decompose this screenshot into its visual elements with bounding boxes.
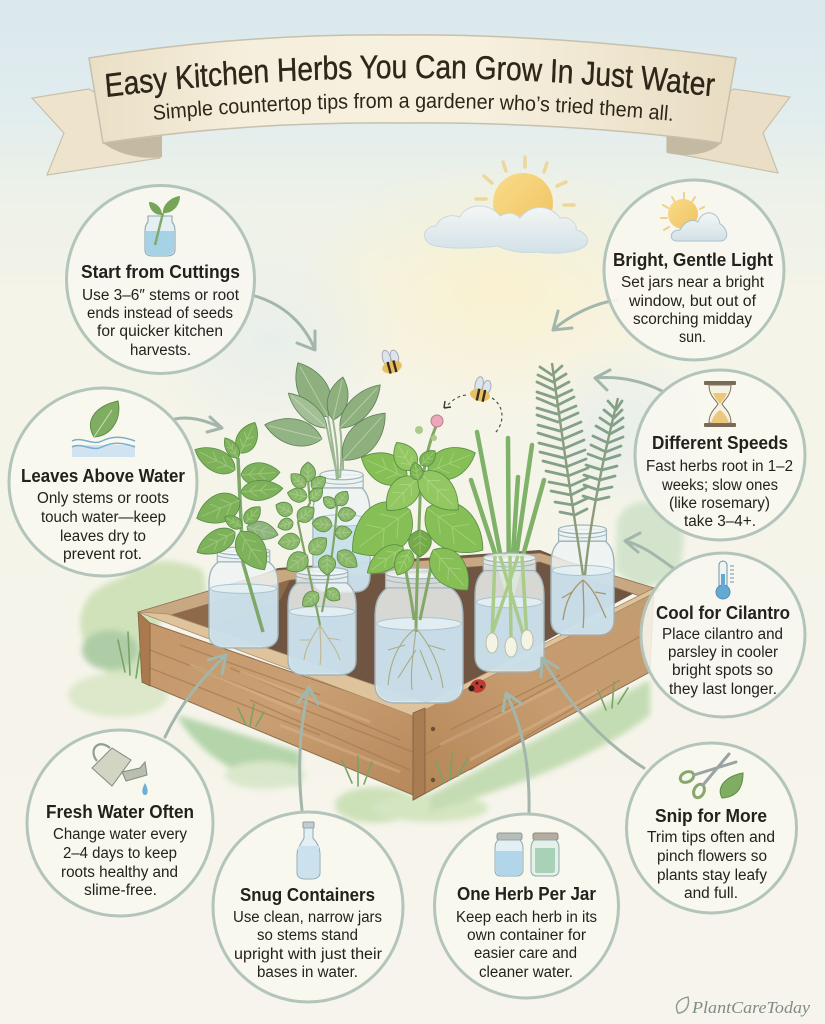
herb: sage in back jar [262, 356, 396, 592]
top rim [138, 588, 660, 716]
raised wood planter [118, 550, 660, 800]
panel: different speeds: Different Speeds [652, 433, 788, 453]
icon: bottle [297, 822, 320, 879]
panel: start from cuttings: for quicker kitchen [97, 323, 223, 340]
icon: jar with sprout [145, 196, 180, 256]
sun and cloud [424, 157, 588, 253]
herb: rosemary jar [537, 363, 623, 635]
bees [378, 347, 502, 434]
panel: snip for more: and full. [684, 885, 738, 902]
panel: snug containers [213, 812, 403, 1002]
panel: cool for cilantro: bright spots so [672, 662, 773, 679]
panel: cool for cilantro: Cool for Cilantro [656, 603, 790, 623]
panel: leaves above water: prevent rot. [63, 546, 142, 563]
panel: leaves above water [9, 388, 197, 576]
panel: fresh water often: 2–4 days to keep [63, 845, 177, 862]
panel: snug containers: Snug Containers [240, 885, 375, 905]
front corner post [413, 708, 425, 800]
panel: different speeds [635, 370, 805, 540]
subtitle text: Simple countertop tips from a gardener who’s tried them all. [154, 92, 672, 122]
panel: fresh water often: slime-free. [84, 882, 157, 899]
herb: mint jar [190, 418, 284, 648]
herb: basil jar [338, 415, 496, 703]
panel: cool for cilantro: parsley in cooler [668, 644, 778, 661]
arrows [165, 296, 673, 812]
panel: one herb per jar: Keep each herb in its [456, 909, 597, 926]
soil [166, 550, 640, 705]
panel: cool for cilantro: they last longer. [669, 681, 777, 698]
icon: thermometer [716, 561, 734, 599]
icon: leaf over water [72, 401, 135, 457]
panel: snug containers: upright with just their [234, 946, 382, 963]
panel: leaves above water: Only stems or roots [37, 490, 169, 507]
grass patches [68, 501, 684, 823]
panel: bright gentle light: Bright, Gentle Light [613, 250, 773, 270]
panel: snug containers: so stems stand [257, 927, 358, 944]
right wood face [413, 588, 654, 800]
panel: snip for more: pinch flowers so [657, 848, 767, 865]
panel: cool for cilantro: Place cilantro and [662, 626, 783, 643]
panel: start from cuttings: ends instead of seeds [87, 305, 233, 322]
panel: one herb per jar: own container for [467, 927, 586, 944]
panel: leaves above water: touch water—keep [41, 509, 166, 526]
icon: scissors and leaf [679, 754, 743, 799]
panel: cool for cilantro [641, 553, 805, 717]
panel: snip for more: plants stay leafy [657, 867, 767, 884]
panel: one herb per jar: easier care and [474, 945, 577, 962]
panel: fresh water often: Change water every [53, 826, 187, 843]
title banner [31, 34, 791, 176]
panel: fresh water often: Fresh Water Often [46, 802, 194, 822]
panel: one herb per jar: One Herb Per Jar [457, 884, 596, 904]
panel: one herb per jar: cleaner water. [479, 964, 573, 981]
icon: two jars [495, 833, 559, 876]
panel: leaves above water: leaves dry to [60, 528, 146, 545]
panel: bright gentle light: window, but out of [628, 293, 757, 310]
title text: Easy Kitchen Herbs You Can Grow In Just Water [106, 54, 716, 98]
panel: fresh water often: roots healthy and [61, 864, 178, 881]
panel: snip for more: Snip for More [655, 806, 767, 826]
panel: start from cuttings: Use 3–6″ stems or root [82, 287, 240, 304]
panel: leaves above water: Leaves Above Water [21, 466, 185, 486]
herb: oregano jar [273, 462, 362, 675]
ladybug [466, 677, 488, 696]
icon: hourglass [704, 381, 736, 427]
panel: bright gentle light: Set jars near a bright [621, 274, 765, 291]
left wood face [142, 623, 413, 795]
panel: bright gentle light: scorching midday [633, 311, 752, 328]
panel: different speeds: take 3–4+. [684, 513, 756, 530]
flower [415, 415, 443, 441]
panel: one herb per jar [434, 814, 618, 998]
panel: fresh water often [27, 730, 213, 916]
herb: green onion jar [471, 432, 544, 672]
panel: start from cuttings: harvests. [130, 342, 191, 359]
back rim and inner wall [138, 553, 654, 616]
panel: snip for more: Trim tips often and [647, 829, 775, 846]
grass tufts [118, 632, 628, 786]
panel: start from cuttings: Start from Cuttings [81, 262, 240, 282]
panel: snip for more [626, 743, 796, 913]
logo: PlantCareToday: PlantCareToday [691, 998, 810, 1017]
panel: different speeds: weeks; slow ones [661, 477, 778, 494]
panel: different speeds: (like rosemary) [669, 495, 770, 512]
icon: sun and cloud [661, 193, 727, 241]
panel: start from cuttings [66, 186, 254, 374]
panel: bright gentle light [604, 180, 784, 360]
panel: snug containers: Use clean, narrow jars [233, 909, 382, 926]
panel: snug containers: bases in water. [257, 964, 358, 981]
panel: bright gentle light: sun. [679, 329, 706, 346]
icon: watering can [92, 744, 148, 795]
panel: different speeds: Fast herbs root in 1–2 [646, 458, 793, 475]
left corner post [138, 612, 150, 686]
